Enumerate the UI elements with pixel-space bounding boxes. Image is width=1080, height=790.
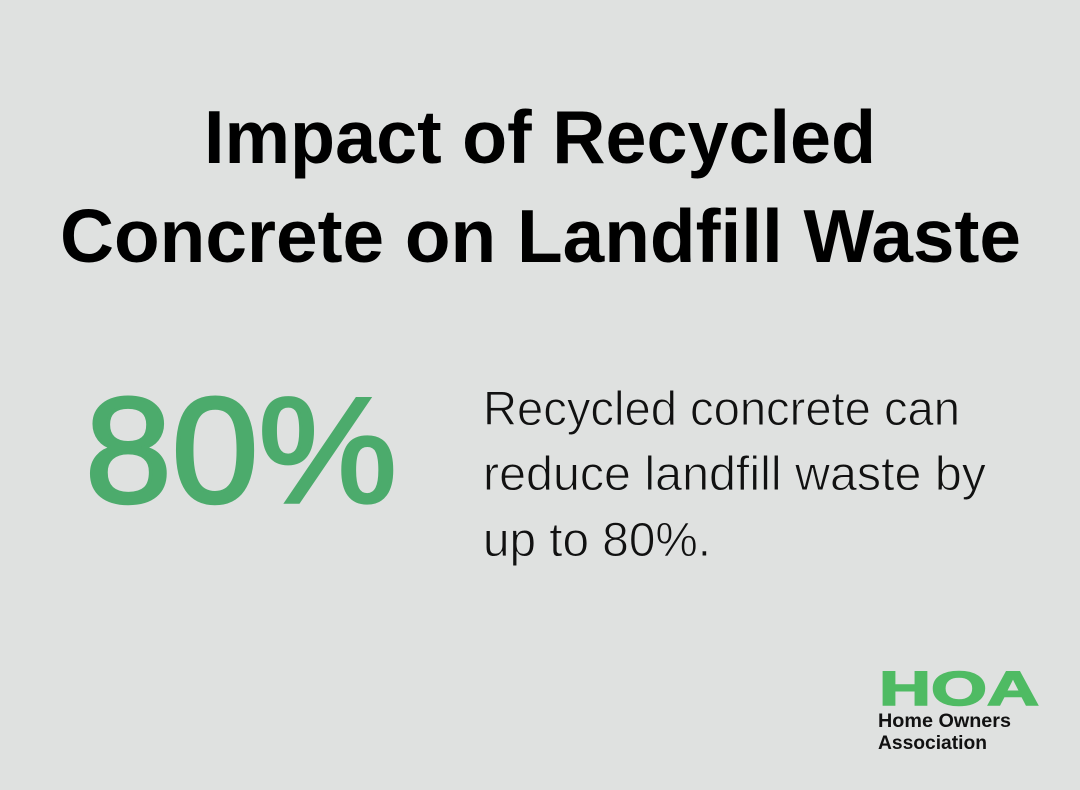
description text <box>483 383 986 567</box>
logo: Home Owners Association <box>878 663 1039 754</box>
title <box>60 95 1021 278</box>
logo name: Home Owners <box>878 710 1011 732</box>
description text: up to 80%. <box>483 514 711 567</box>
logo name <box>878 710 1011 754</box>
big statistic: 80%: 80% <box>85 366 397 534</box>
logo mark: HOA: HOA <box>879 663 1039 716</box>
title: Concrete on Landfill Waste <box>60 194 1021 278</box>
description text: reduce landfill waste by <box>483 448 986 501</box>
description text: Recycled concrete can <box>483 383 960 436</box>
logo name: Association <box>878 732 987 754</box>
title: Impact of Recycled <box>204 95 876 179</box>
